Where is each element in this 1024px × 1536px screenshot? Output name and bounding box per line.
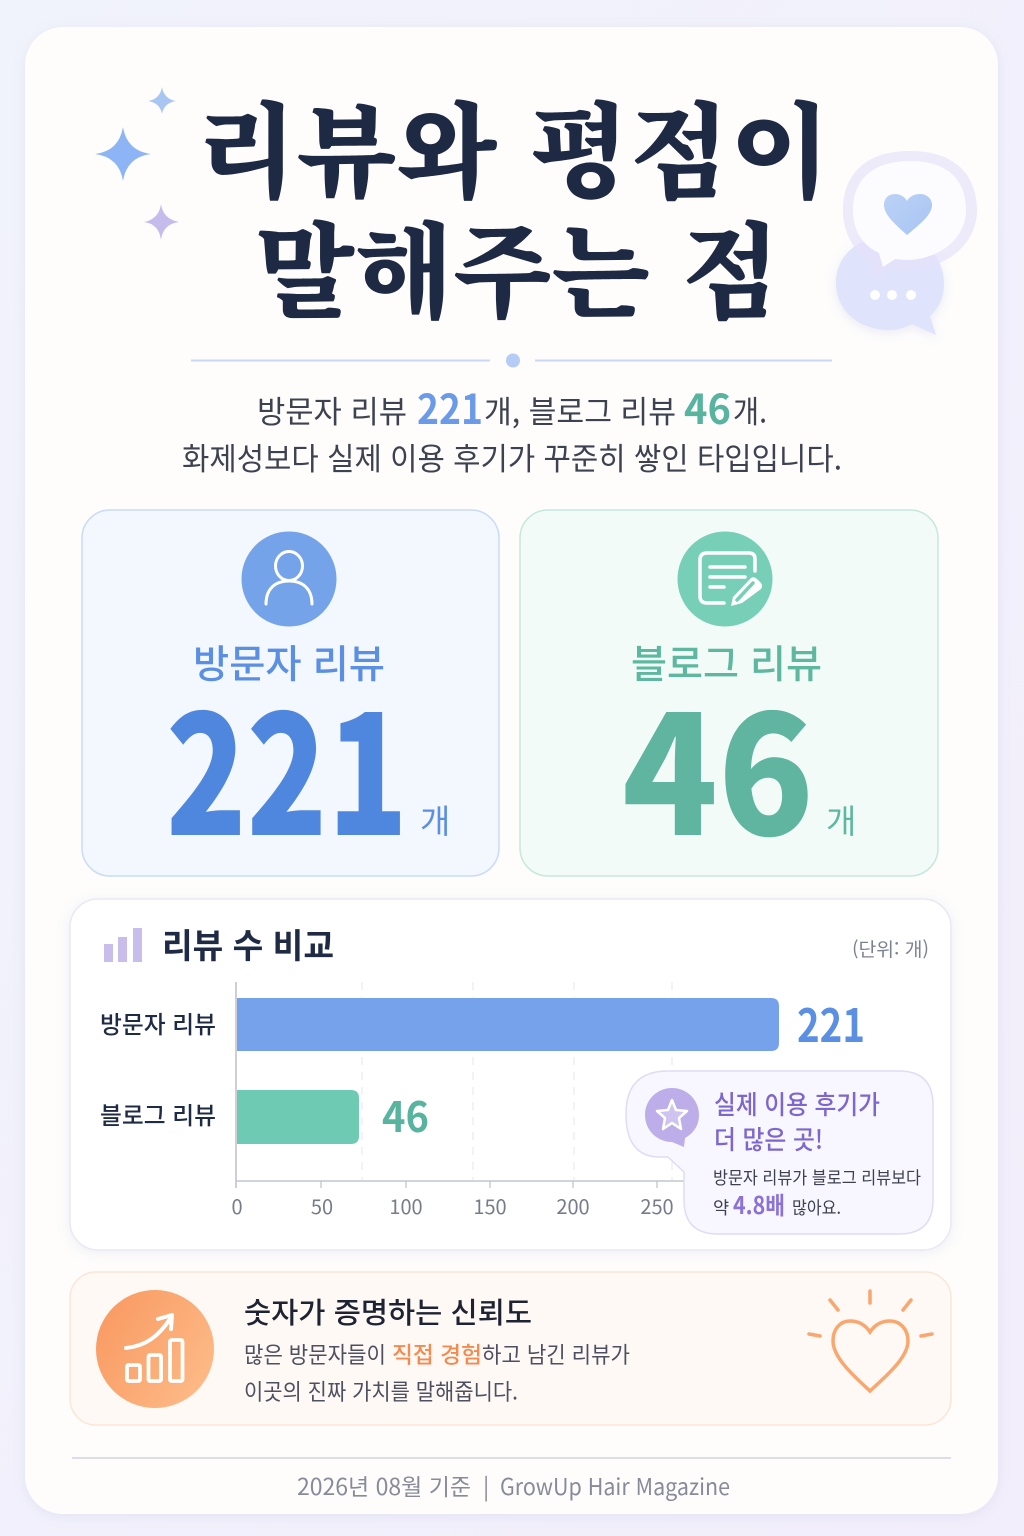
subtitle: 개, 블로그 리뷰	[484, 387, 676, 432]
subtitle: 221	[417, 376, 483, 436]
title: 리뷰와 평점이	[196, 69, 830, 219]
axis labels: 200	[556, 1191, 590, 1220]
icon: person	[242, 532, 336, 626]
number: 46: 46	[622, 644, 814, 883]
chart heading: 리뷰 수 비교	[162, 919, 334, 968]
footer: GrowUp Hair Magazine	[500, 1468, 730, 1502]
heading: visitor reviews: 방문자 리뷰	[193, 634, 385, 690]
callout text: 방문자 리뷰가 블로그 리뷰보다	[713, 1165, 921, 1190]
subtitle: 개.	[733, 387, 767, 432]
panel: visitor reviews	[82, 510, 499, 883]
icon: note and pencil	[678, 532, 772, 626]
unit: 개	[826, 795, 856, 843]
footer: 2026년 08월 기준	[297, 1468, 471, 1502]
trust text: 많은 방문자들이	[244, 1338, 386, 1370]
title	[196, 69, 830, 339]
number: 221: 221	[166, 644, 408, 883]
unit: 개	[420, 795, 450, 843]
callout: 더 많은 곳!	[714, 1120, 823, 1157]
icon: chat bubbles	[836, 151, 977, 335]
trust text: 직접 경험	[392, 1338, 482, 1370]
icon: star bubble	[645, 1088, 699, 1147]
bar chart	[100, 982, 865, 1220]
trust heading: 숫자가 증명하는 신뢰도	[244, 1290, 532, 1332]
subtitle: 화제성보다 실제 이용 후기가 꾸준히 쌓인 타입입니다.	[182, 434, 842, 479]
divider	[191, 354, 832, 368]
value: 221: 221	[797, 990, 865, 1056]
footer	[297, 1468, 730, 1502]
axis labels: 250	[640, 1191, 674, 1220]
footer divider	[72, 1457, 951, 1459]
subtitle	[182, 376, 842, 479]
axis labels: 0	[231, 1191, 243, 1220]
bar: blog	[237, 1090, 359, 1144]
trust text	[244, 1338, 630, 1407]
callout: 약	[713, 1195, 729, 1220]
icon: growth chart	[96, 1290, 214, 1408]
axis labels: 150	[473, 1191, 507, 1220]
title: 말해주는 점	[256, 189, 780, 339]
subtitle: 46	[684, 376, 731, 436]
icon: sparkles	[95, 87, 179, 240]
callout: 많아요.	[792, 1195, 841, 1220]
subtitle: 방문자 리뷰	[257, 387, 407, 432]
panel: chart	[70, 899, 951, 1250]
callout heading: 실제 이용 후기가	[714, 1085, 880, 1122]
value: 46: 46	[382, 1084, 429, 1145]
icon: bars	[104, 928, 142, 962]
unit note: (단위: 개)	[852, 935, 929, 962]
axis labels: 100	[389, 1191, 423, 1220]
callout: 4.8배	[733, 1186, 785, 1221]
bar: visitor	[237, 998, 779, 1051]
row label: visitor: 방문자 리뷰	[100, 1005, 216, 1040]
heading: blog reviews: 블로그 리뷰	[631, 634, 822, 690]
trust text: 이곳의 진짜 가치를 말해줍니다.	[244, 1375, 518, 1407]
axis labels: 50	[311, 1191, 333, 1220]
trust text: 하고 남긴 리뷰가	[482, 1338, 630, 1370]
callout	[626, 1071, 933, 1234]
icon: glowing heart	[809, 1291, 932, 1391]
axis labels	[231, 1191, 674, 1220]
panel: blog reviews	[520, 510, 938, 883]
panel: trust	[70, 1272, 951, 1425]
row label: blog: 블로그 리뷰	[100, 1096, 216, 1131]
footer: |	[483, 1468, 489, 1502]
